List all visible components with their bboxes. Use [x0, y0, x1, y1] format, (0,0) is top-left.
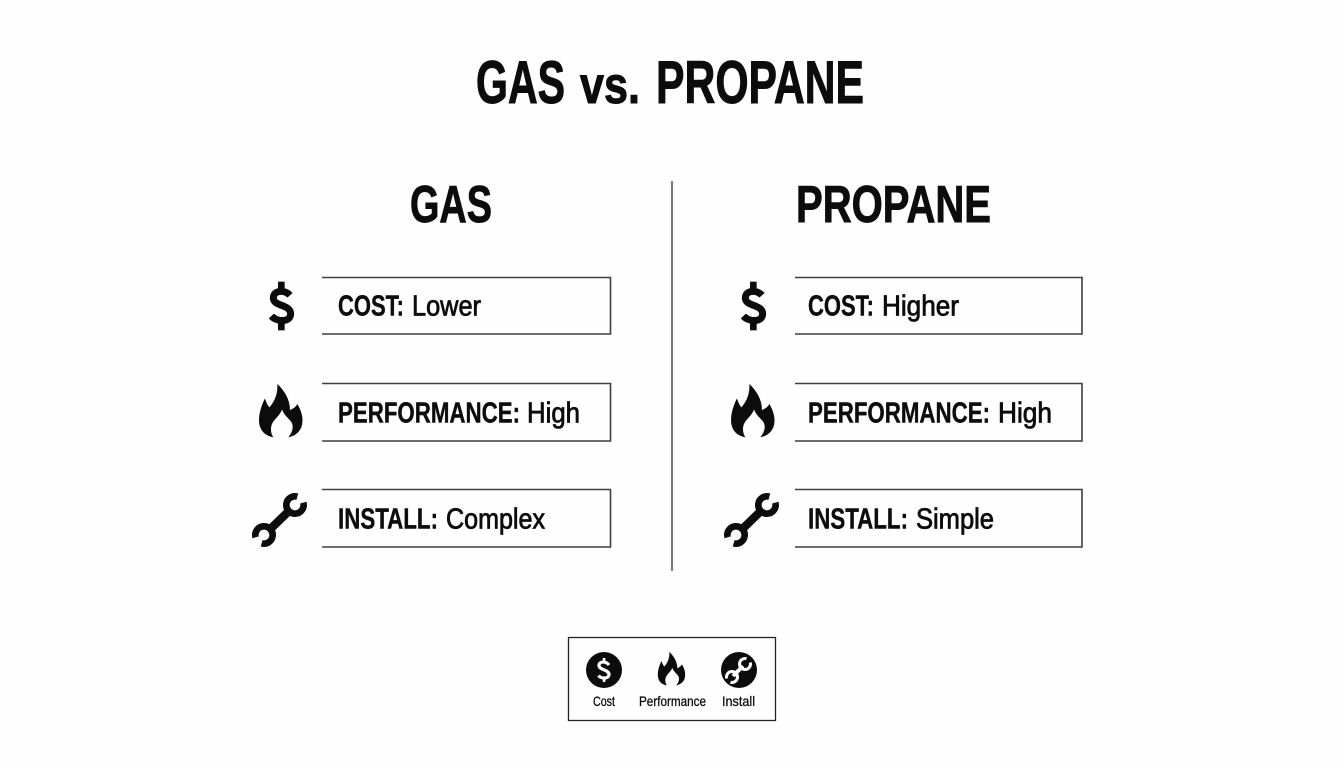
row: gas install: Complex — [446, 504, 545, 536]
title: PROPANE — [656, 49, 864, 116]
row: propane performance — [795, 384, 1082, 441]
row: gas install — [322, 490, 610, 547]
icon: propane cost dollar — [743, 282, 763, 330]
legend icon: install — [721, 652, 757, 688]
row: gas cost: COST: — [338, 290, 404, 322]
panel: propane column — [727, 278, 1082, 547]
row: gas cost: Lower — [412, 290, 481, 322]
row: gas cost — [322, 278, 610, 334]
title — [476, 49, 864, 116]
heading: propane: PROPANE — [796, 176, 991, 234]
legend label: cost: Cost — [593, 693, 615, 709]
title: vs. — [580, 57, 640, 115]
icon: gas performance flame — [259, 384, 303, 437]
icon: gas install wrench — [255, 496, 304, 544]
row: propane performance: PERFORMANCE: — [808, 398, 990, 430]
row: gas performance — [322, 384, 610, 441]
row: propane install — [795, 490, 1082, 547]
icon: propane performance flame — [731, 384, 775, 437]
row: propane cost — [795, 278, 1082, 334]
row: gas install: INSTALL: — [338, 504, 438, 536]
legend — [568, 638, 776, 720]
panel: gas column — [255, 278, 610, 547]
legend label: performance: Performance — [639, 693, 706, 709]
icon: gas cost dollar — [271, 282, 291, 330]
icon: propane install wrench — [727, 496, 776, 544]
center divider — [671, 181, 673, 571]
row: propane install: INSTALL: — [808, 504, 908, 536]
row: propane cost: Higher — [882, 290, 959, 322]
legend icon: performance — [658, 652, 685, 685]
row: propane install: Simple — [916, 504, 994, 536]
row: gas performance: High — [527, 398, 580, 430]
row: gas performance: PERFORMANCE: — [338, 398, 520, 430]
legend label: install: Install — [722, 693, 755, 709]
title: GAS — [476, 49, 565, 116]
heading: gas: GAS — [410, 176, 492, 234]
row: propane performance: High — [998, 398, 1052, 430]
legend icon: cost — [586, 652, 622, 688]
row: propane cost: COST: — [808, 290, 874, 322]
